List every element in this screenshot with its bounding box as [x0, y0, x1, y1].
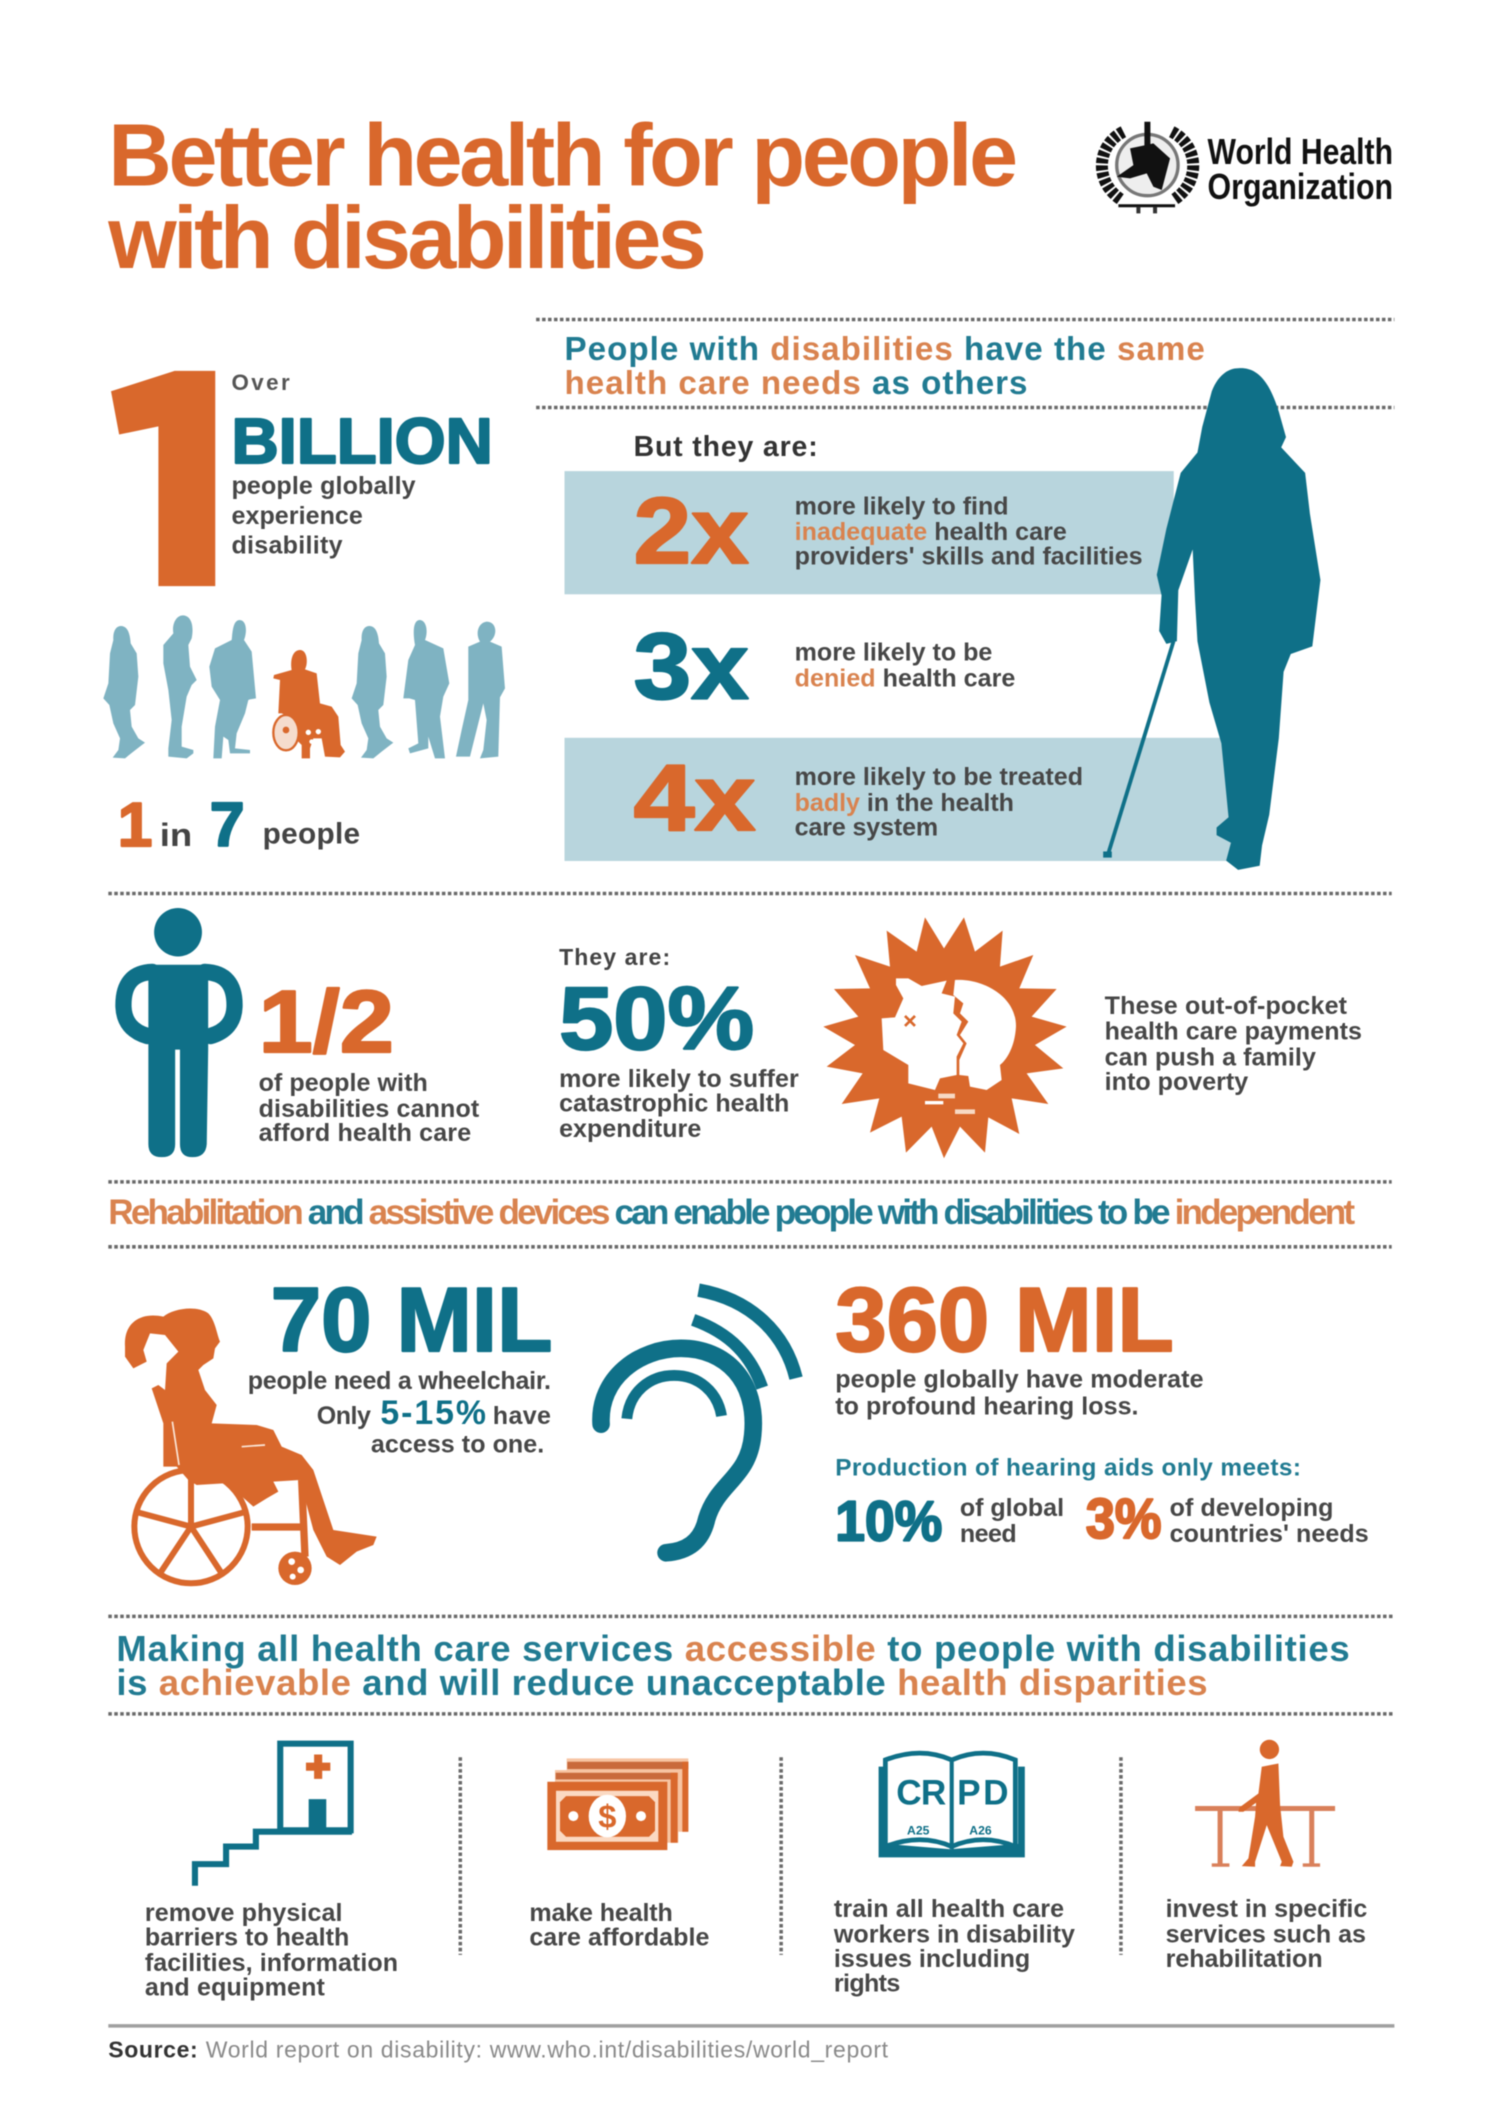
stat: 70 million wheelchairs: people need a wheelchair.	[248, 1367, 551, 1395]
title: with disabilities	[107, 188, 707, 287]
icon: CRPD book: A25	[907, 1823, 930, 1837]
stat: 10 percent of global need: of global	[960, 1494, 1064, 1522]
stat: one half cannot afford	[259, 972, 480, 1147]
title	[107, 105, 1018, 287]
stat: 50 percent: 50%	[559, 968, 754, 1068]
icon: person in wheelchair	[273, 650, 345, 758]
stat: 3x: denied health care	[795, 664, 1015, 692]
stat: 50 percent: expenditure	[559, 1115, 701, 1143]
stat: 70 million wheelchairs	[248, 1270, 552, 1459]
logo: World Health Organization	[1102, 122, 1393, 213]
panel: 2x band	[565, 471, 1174, 594]
text: out-of-pocket payments	[1105, 992, 1362, 1096]
text: out-of-pocket payments: into poverty	[1105, 1068, 1248, 1096]
title: Better health for people	[108, 105, 1018, 204]
heading: same health care needs	[565, 331, 1205, 402]
source line: World report on disability: www.who.int/disabilities/world_report	[206, 2037, 889, 2063]
stat: 70 million wheelchairs: 70 MIL	[271, 1270, 552, 1371]
icon: CRPD book: A26	[969, 1823, 992, 1837]
action: make care affordable: make health	[529, 1899, 673, 1927]
stat: 50 percent: catastrophic health	[559, 1089, 789, 1117]
logo: World Health Organization: World Health	[1208, 131, 1393, 172]
panel: 4x band	[565, 738, 1255, 861]
big numeral 1	[111, 371, 215, 586]
icon: standing person with empty pockets	[123, 908, 235, 1157]
heading: making services accessible: is achievable and will reduce unacceptable health disparities	[116, 1662, 1208, 1703]
stat: 2x: more likely to find	[795, 492, 1009, 520]
icon: WHO emblem	[1102, 122, 1193, 213]
icon: broken piggy bank starburst	[823, 917, 1067, 1158]
stat: 3 percent of developing countries	[1086, 1488, 1369, 1551]
stat: 2x: 2x	[634, 478, 749, 583]
icon: hospital with stairs	[195, 1744, 352, 1886]
text: out-of-pocket payments: can push a family	[1105, 1043, 1316, 1071]
action: train health care workers: rights	[834, 1969, 900, 1997]
stat: 360 million hearing loss: people globally have moderate	[835, 1366, 1204, 1394]
heading: same health care needs: People with disabilities have the same	[565, 331, 1205, 368]
stat: 3 percent of developing countries: of developing	[1170, 1494, 1333, 1522]
stat: 10 percent of global need: 10%	[835, 1491, 942, 1554]
action: remove physical barriers	[145, 1744, 398, 2001]
stat: 50 percent: They are:	[559, 944, 670, 970]
stat: 4x: more likely to be treated	[795, 763, 1083, 791]
panel: one billion: experience	[232, 502, 363, 530]
stat: 70 million wheelchairs: access to one.	[371, 1431, 544, 1459]
icon: CRPD book: CR	[896, 1774, 946, 1813]
action: train health care workers	[833, 1753, 1075, 1997]
action: invest in rehabilitation: services such as	[1166, 1921, 1366, 1949]
logo: World Health Organization: Organization	[1208, 166, 1393, 207]
stat: 50 percent: more likely to suffer	[559, 1065, 799, 1093]
icon: person walking between parallel bars	[1195, 1740, 1335, 1867]
caption: 1 in 7 people: 1	[118, 791, 152, 860]
stat: 10 percent of global need: need	[960, 1520, 1017, 1548]
stat: one half cannot afford: of people with	[259, 1069, 428, 1097]
text: out-of-pocket payments: health care payments	[1105, 1018, 1362, 1046]
icon: ear with sound waves	[601, 1290, 796, 1553]
stat: 4x: 4x	[634, 745, 755, 850]
stat: 70 million wheelchairs: 5-15%	[380, 1394, 486, 1432]
stat: 70 million wheelchairs: have	[493, 1402, 551, 1430]
label: but they are: But they are:	[634, 431, 818, 463]
panel: one billion	[111, 370, 493, 586]
stat: 2x: providers' skills and facilities	[795, 543, 1143, 571]
icon: CRPD book	[879, 1753, 1025, 1857]
stat: 4x	[634, 745, 1083, 850]
stat: one half cannot afford: disabilities cannot	[259, 1095, 480, 1123]
stat: one half cannot afford: afford health care	[259, 1119, 471, 1147]
icon: stack of banknotes: $	[598, 1797, 616, 1834]
action: make care affordable: care affordable	[529, 1923, 709, 1951]
caption: 1 in 7 people: in	[160, 817, 192, 853]
heading: rehabilitation: Rehabilitation and assistive devices can enable people with disabilities to be independent	[108, 1193, 1355, 1232]
action: train health care workers: issues including	[834, 1945, 1030, 1973]
panel: one billion: disability	[232, 532, 343, 560]
stat: 360 million hearing loss: to profound hearing loss.	[835, 1393, 1139, 1421]
stat: one half cannot afford: 1/2	[259, 972, 394, 1071]
caption: 1 in 7 people: people	[263, 817, 360, 850]
action: invest in rehabilitation	[1166, 1740, 1367, 1973]
source line: Source:	[108, 2037, 198, 2063]
stat: 70 million wheelchairs: Only	[317, 1402, 371, 1430]
stat: 50 percent	[559, 944, 799, 1143]
stat: 10 percent of global need	[835, 1491, 1064, 1554]
action: train health care workers: train all health care	[834, 1895, 1064, 1923]
stat: 4x: care system	[795, 813, 938, 841]
action: make care affordable	[529, 1758, 709, 1951]
action: remove physical barriers: remove physical	[145, 1899, 343, 1927]
icon group: seven people silhouettes	[103, 615, 505, 758]
stat: 2x	[634, 478, 1143, 583]
panel: one billion: BILLION	[232, 406, 493, 477]
heading: same health care needs: health care needs as others	[565, 365, 1028, 402]
action: remove physical barriers: facilities, information	[145, 1949, 398, 1977]
stat: 3x: more likely to be	[795, 639, 992, 667]
action: remove physical barriers: and equipment	[145, 1973, 326, 2001]
stat: 3x: 3x	[634, 614, 749, 719]
caption: 1 in 7 people: 7	[210, 791, 244, 860]
stat: 3 percent of developing countries: countries' needs	[1170, 1520, 1369, 1548]
action: invest in rehabilitation: invest in specific	[1166, 1895, 1367, 1923]
stat: 3 percent of developing countries: 3%	[1086, 1488, 1162, 1551]
action: remove physical barriers: barriers to health	[145, 1923, 349, 1951]
stat: 360 million hearing loss	[835, 1270, 1301, 1482]
caption: 1 in 7 people	[118, 791, 360, 860]
stat: 2x: inadequate health care	[795, 518, 1067, 546]
text: out-of-pocket payments: These out-of-pocket	[1105, 992, 1348, 1020]
heading: making services accessible: Making all health care services accessible to people with disabilities	[116, 1628, 1350, 1669]
icon: woman with cane silhouette	[1103, 368, 1320, 870]
panel: one billion: Over	[232, 370, 290, 395]
icon: girl in wheelchair	[125, 1309, 377, 1585]
stat: 4x: badly in the health	[795, 789, 1014, 817]
panel: one billion: people globally	[232, 472, 416, 500]
stat: 360 million hearing loss: 360 MIL	[835, 1270, 1174, 1371]
heading: making services accessible	[116, 1628, 1350, 1703]
stat: 3x	[634, 614, 1015, 719]
action: train health care workers: workers in disability	[833, 1921, 1075, 1949]
action: invest in rehabilitation: rehabilitation	[1166, 1945, 1323, 1973]
icon: CRPD book: PD	[957, 1774, 1009, 1813]
icon: stack of banknotes	[547, 1758, 688, 1850]
stat: 360 million hearing loss: Production of hearing aids only meets:	[835, 1455, 1301, 1482]
